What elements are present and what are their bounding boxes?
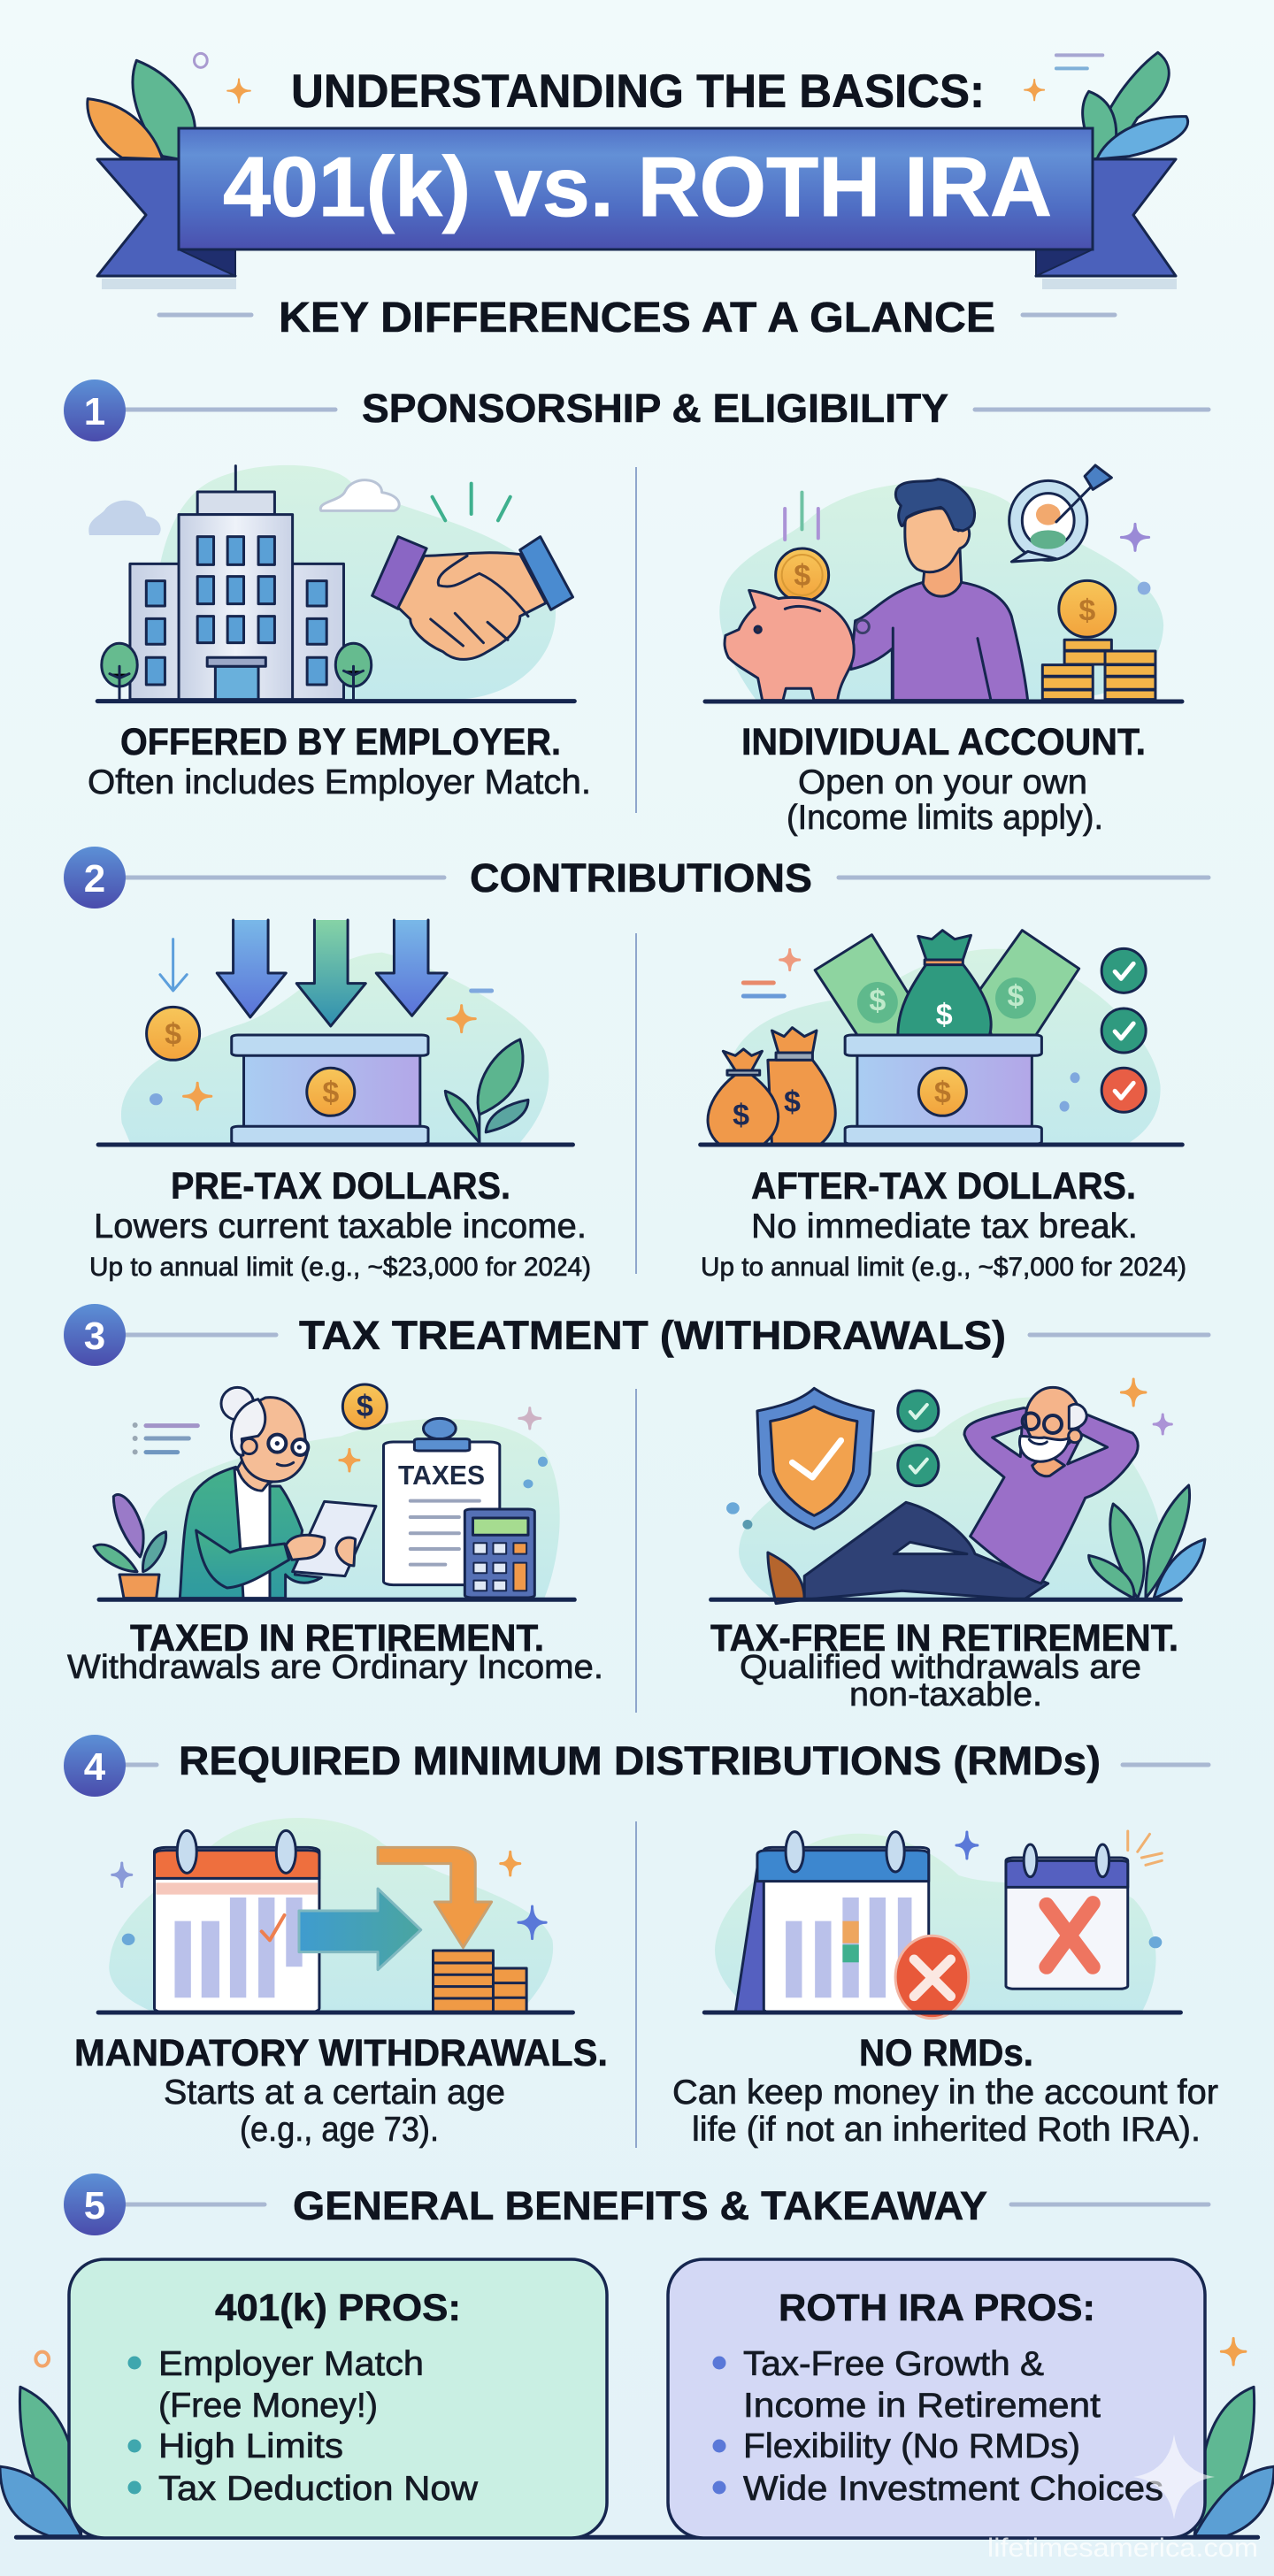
icon: person with piggy bank and target [719,465,1163,700]
panel: Roth IRA RMDs [672,1831,1218,2149]
icon: tax clipboard and calculator [99,1384,574,1599]
icon: header decorations and leaves [88,52,1188,159]
title line: UNDERSTANDING THE BASICS: [291,65,985,118]
bullet list: High Limits [158,2427,343,2465]
bullet list: Income in Retirement [743,2387,1101,2425]
panel: 401(k) pros [69,2259,607,2538]
icon: arrows into box with coins and plant: $ [322,1076,339,1109]
icon: arrows into box with coins and plant: $ [165,1017,181,1051]
section 2 heading [64,847,1209,908]
panel: 401(k) taxes [67,1384,603,1686]
icon: person with piggy bank and target: $ [1078,594,1095,627]
text: Can keep money in the account for [672,2074,1218,2112]
heading: NO RMDs. [859,2032,1033,2074]
text: Open on your own [798,763,1087,801]
section 5 heading: 5 [84,2184,105,2227]
section 4 heading: REQUIRED MINIMUM DISTRIBUTIONS (RMDs) [179,1738,1101,1783]
section 3 heading [64,1304,1209,1366]
heading: TAXED IN RETIREMENT. [130,1617,544,1660]
section 1 heading: SPONSORSHIP & ELIGIBILITY [362,386,948,431]
heading: MANDATORY WITHDRAWALS. [74,2032,608,2074]
bullet list: Tax Deduction Now [158,2470,479,2508]
text: Qualified withdrawals are [740,1649,1141,1686]
heading: INDIVIDUAL ACCOUNT. [741,721,1146,763]
text: non-taxable. [849,1676,1042,1714]
icon: money in box, money bags and checks: $ [1008,979,1025,1013]
panel: Roth IRA taxes [710,1379,1205,1714]
icon: money in box, money bags and checks: $ [784,1085,801,1119]
panel: Roth IRA contributions [701,931,1186,1282]
section 1 heading: 1 [84,390,105,433]
panel: 401(k) RMDs [74,1818,608,2149]
watermark: lifetimesamerica.com [987,2534,1258,2563]
bullet list: (Free Money!) [158,2387,378,2425]
text: No immediate tax break. [751,1208,1138,1246]
section 2 heading: 2 [84,857,105,901]
panel: 401(k) contributions [89,920,591,1282]
panel: Roth IRA sponsorship [705,465,1182,837]
section 4 heading [64,1735,1209,1797]
section 5 heading [64,2174,1209,2235]
icon: calendar, arrows and coin stacks [98,1818,572,2012]
bullet list: Employer Match [158,2345,424,2383]
icon: person and piggy bank [725,479,1028,701]
icon: tax clipboard and calculator: $ [357,1390,373,1423]
header [88,52,1188,341]
icon: money in box, money bags and checks: $ [936,998,953,1031]
icon: money in box, money bags and checks: $ [733,1099,749,1132]
icon: arrows into box with coins and plant [98,920,572,1145]
subtitle: KEY DIFFERENCES AT A GLANCE [279,295,995,341]
section 3 heading: TAX TREATMENT (WITHDRAWALS) [299,1313,1006,1358]
note: Up to annual limit (e.g., ~$7,000 for 2024) [701,1253,1186,1282]
section 5 heading: GENERAL BENEFITS & TAKEAWAY [293,2183,987,2228]
icon: money in box, money bags and checks [701,931,1182,1145]
icon: sparkle [1133,2434,1215,2519]
icon: money in box, money bags and checks: $ [934,1076,951,1109]
heading: 401(k) PROS: [215,2287,461,2329]
heading: OFFERED BY EMPLOYER. [120,721,561,763]
icon: office building and handshake [88,465,574,702]
text: Often includes Employer Match. [88,763,591,801]
label: TAXES: TAXES [398,1460,485,1491]
text: Lowers current taxable income. [94,1208,587,1246]
text: (e.g., age 73). [240,2111,439,2149]
heading: TAX-FREE IN RETIREMENT. [710,1617,1178,1660]
section 2 heading: CONTRIBUTIONS [470,855,812,901]
banner title: 401(k) vs. ROTH IRA [223,140,1052,234]
bullet list [127,2345,479,2508]
icon: money in box, money bags and checks: $ [869,984,886,1017]
section 3 heading: 3 [84,1315,105,1358]
icon: relaxed retiree [964,1387,1138,1583]
icon: person and piggy bank: $ [794,559,810,593]
panel: Roth IRA pros [668,2259,1205,2538]
icon: footer leaves and decorations [0,2338,1274,2537]
icon: older woman reading with plant [94,1387,376,1598]
section 1 heading [64,380,1209,441]
banner [97,128,1177,289]
bullet list: Flexibility (No RMDs) [743,2427,1080,2465]
note: Up to annual limit (e.g., ~$23,000 for 2024) [89,1253,591,1282]
panel: 401(k) sponsorship [88,465,591,801]
icon: calendars with red crosses [704,1831,1180,2019]
ground line [705,699,1182,704]
bullet list: Tax-Free Growth & [743,2345,1044,2383]
bullet list: Wide Investment Choices [743,2470,1163,2508]
bullet list [713,2345,1163,2508]
text: Withdrawals are Ordinary Income. [67,1649,603,1686]
heading: PRE-TAX DOLLARS. [171,1165,510,1208]
section 4 heading: 4 [84,1745,106,1789]
heading: ROTH IRA PROS: [779,2287,1095,2329]
heading: AFTER-TAX DOLLARS. [751,1165,1136,1208]
text: life (if not an inherited Roth IRA). [692,2111,1201,2149]
text: Starts at a certain age [164,2074,505,2112]
text: (Income limits apply). [787,799,1103,837]
icon: shield, legs and plants [711,1379,1205,1604]
